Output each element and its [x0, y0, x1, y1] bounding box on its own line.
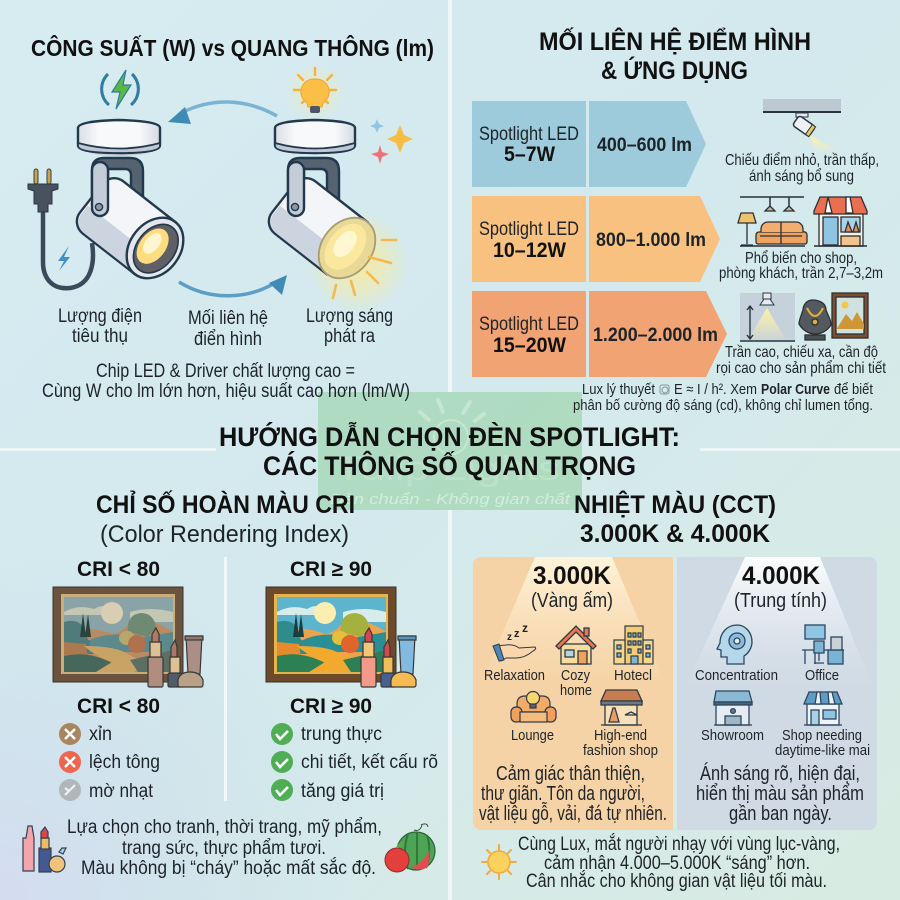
text: lux note	[573, 381, 874, 414]
icon: office	[802, 625, 844, 664]
icon: concentration	[717, 625, 752, 664]
labels: warm uses: home	[560, 682, 592, 699]
icon: fruits	[385, 824, 435, 872]
text: chip note	[42, 361, 410, 402]
image: painting vivid	[266, 587, 416, 687]
icon: sun	[482, 845, 516, 879]
list: CRI below 80	[59, 723, 160, 802]
list: CRI above 90: tăng giá trị	[301, 781, 384, 802]
text: neutral description: gần ban ngày.	[729, 803, 832, 825]
panel: CRI	[23, 489, 438, 879]
labels: warm uses: Lounge	[511, 727, 554, 744]
row: 15-20W: 1.200–2.000 lm	[593, 325, 718, 346]
labels: warm uses: Relaxation	[484, 667, 545, 684]
heading: CRI: CHỈ SỐ HOÀN MÀU CRI	[96, 489, 355, 519]
main title: CÁC THÔNG SỐ QUAN TRỌNG	[263, 449, 636, 481]
row: 5-7W: 5–7W	[504, 143, 555, 166]
text: row 3 use	[716, 344, 886, 377]
card: 3000K: 3.000K	[533, 562, 611, 590]
text: row 1 use	[725, 151, 879, 185]
list: CRI above 90: chi tiết, kết cấu rõ	[301, 752, 438, 773]
text: row 2 use: Phổ biến cho shop,	[745, 249, 857, 267]
labels: neutral uses: Shop needing	[782, 727, 862, 744]
heading: công suất vs quang thông: CÔNG SUẤT (W) vs QUANG THÔNG (lm)	[31, 34, 434, 61]
text: warm description	[479, 763, 667, 825]
text: lux note: Lux lý thuyết	[582, 381, 656, 398]
text: CCT note: Cân nhắc cho không gian vật liệu tối màu.	[526, 870, 827, 892]
watermark: Tulip Lights	[335, 450, 560, 488]
icon: lounge	[511, 692, 556, 722]
list: CRI below 80: mờ nhạt	[89, 781, 154, 802]
heading: mối liên hệ: MỐI LIÊN HỆ ĐIỂM HÌNH	[539, 26, 811, 56]
icon: showroom	[714, 691, 752, 725]
labels: neutral uses	[695, 667, 870, 759]
row: 5-7W: Spotlight LED	[479, 124, 579, 145]
icon: relaxation	[493, 621, 536, 661]
panel: công suất vs quang thông	[28, 34, 434, 402]
text: warm description: thư giãn. Tôn da người,	[481, 783, 645, 805]
text: row 2 use	[719, 249, 883, 282]
card: 4000K: (Trung tính)	[734, 590, 827, 612]
card: 4000K	[677, 557, 877, 830]
text: mối liên hệ: Mối liên hệ	[188, 308, 268, 329]
text: CRI note: Lựa chọn cho tranh, thời trang, mỹ phẩm,	[67, 817, 382, 838]
icon: sparkles	[370, 119, 413, 164]
icon: cosmetics	[23, 826, 66, 872]
labels: warm uses: High-end	[594, 727, 647, 744]
labels: warm uses: Cozy	[561, 667, 590, 684]
panel: CCT	[473, 489, 877, 892]
row: 10-12W: Spotlight LED	[479, 219, 579, 240]
text: CCT note: Cùng Lux, mắt người nhạy với vùng lục-vàng,	[518, 833, 840, 855]
card: 3000K	[473, 557, 673, 830]
text: chip note: Chip LED & Driver chất lượng cao =	[96, 361, 355, 382]
card: 4000K: 4.000K	[742, 562, 820, 590]
text: warm description: Cảm giác thân thiện,	[496, 763, 645, 785]
text: lux note: E ≈ I / h². Xem	[674, 381, 757, 398]
text: neutral description: Ánh sáng rõ, hiện đại,	[700, 762, 860, 785]
text: CRI note: Màu không bị “cháy” hoặc mất sắc độ.	[81, 857, 376, 879]
text: row 1 use: ánh sáng bổ sung	[749, 167, 854, 185]
divider	[224, 557, 227, 801]
icon: spotlight left	[71, 120, 195, 289]
text: neutral description: hiển thị màu sản phẩm	[696, 783, 864, 805]
text: lượng điện	[58, 306, 142, 347]
text: mối liên hệ	[188, 308, 268, 350]
text: CRI note	[67, 817, 382, 879]
image: painting dull	[53, 587, 203, 687]
icon: fashion shop	[601, 690, 642, 725]
text: CRI note: trang sức, thực phẩm tươi.	[122, 838, 326, 859]
labels: warm uses: fashion shop	[583, 742, 658, 759]
labels: neutral uses: Showroom	[701, 727, 764, 744]
icon: light rays	[333, 240, 396, 298]
labels: neutral uses: daytime-like mai	[775, 742, 870, 759]
watermark	[318, 392, 582, 510]
arrow: top curve	[168, 102, 277, 124]
row: 10-12W	[472, 196, 720, 282]
list: CRI above 90: trung thực	[301, 724, 382, 745]
row: 10-12W: 800–1.000 lm	[596, 230, 706, 251]
icon: spotlight right	[263, 120, 410, 314]
icon: track spotlight	[763, 99, 841, 151]
label: CRI above 90 lower: CRI ≥ 90	[290, 695, 372, 718]
text: CCT note	[518, 833, 840, 892]
icon: necklace bust and painting	[799, 293, 868, 340]
row: 15-20W: 15–20W	[493, 334, 566, 357]
text: CCT note: cảm nhận 4.000–5.000K “sáng” hơn.	[544, 853, 810, 874]
heading: CRI: (Color Rendering Index)	[100, 521, 349, 548]
icon: relaxation: z	[507, 632, 512, 643]
text: mối liên hệ: điển hình	[194, 329, 262, 350]
text: lượng sáng	[306, 306, 393, 347]
icon: high ceiling	[740, 293, 795, 341]
label: CRI below 80 lower: CRI < 80	[77, 695, 160, 718]
text: lượng sáng: phát ra	[324, 326, 375, 347]
labels: neutral uses: Office	[805, 667, 839, 684]
text: chip note: Cùng W cho lm lớn hơn, hiệu suất cao hơn (lm/W)	[42, 381, 410, 402]
icon: hotel	[614, 626, 653, 664]
heading: mối liên hệ	[539, 26, 811, 85]
text: lượng điện: Lượng điện	[58, 306, 142, 327]
main title	[219, 421, 680, 481]
icon: living room	[738, 197, 807, 246]
row: 5-7W: 400–600 lm	[597, 135, 692, 156]
arrow: bottom curve	[179, 275, 287, 296]
text: lux note: Polar Curve	[761, 381, 830, 398]
text: lux note: để biết	[834, 381, 874, 398]
heading: CCT: 3.000K & 4.000K	[580, 520, 770, 548]
list: CRI below 80: lệch tông	[89, 752, 160, 773]
icon: shop	[804, 692, 842, 725]
heading: CCT	[574, 489, 776, 548]
row: 15-20W	[472, 291, 727, 377]
label: CRI above 90: CRI ≥ 90	[290, 558, 372, 581]
text: neutral description	[696, 762, 864, 825]
icon: relaxation: z	[514, 628, 520, 640]
labels: warm uses	[484, 667, 658, 759]
text: lượng điện: tiêu thụ	[72, 326, 128, 347]
text: lượng sáng: Lượng sáng	[306, 306, 393, 327]
heading: CRI	[96, 489, 355, 548]
icon: plug and cord	[28, 169, 93, 288]
icon: light bulb	[285, 62, 345, 122]
icon: relaxation: z	[522, 621, 528, 635]
label: CRI below 80: CRI < 80	[77, 558, 160, 581]
main title: HƯỚNG DẪN CHỌN ĐÈN SPOTLIGHT:	[219, 421, 680, 452]
row: 10-12W: 10–12W	[493, 239, 566, 262]
row: 5-7W	[472, 101, 706, 187]
card: 3000K: (Vàng ấm)	[531, 590, 613, 612]
labels: warm uses: Hotecl	[614, 667, 652, 684]
icon: shop	[814, 197, 867, 246]
heading: CCT: NHIỆT MÀU (CCT)	[574, 489, 776, 519]
watermark: Đèn chuẩn - Không gian chất	[330, 491, 571, 508]
panel: mối liên hệ điển hình	[472, 26, 886, 414]
text: warm description: vật liệu gỗ, vải, đá tự nhiên.	[479, 802, 667, 825]
list: CRI below 80: xỉn	[89, 724, 112, 745]
icon: power bolt	[102, 70, 138, 109]
heading: mối liên hệ: & ỨNG DỤNG	[601, 55, 748, 85]
labels: neutral uses: Concentration	[695, 667, 778, 684]
row: 15-20W: Spotlight LED	[479, 314, 579, 335]
list: CRI above 90	[271, 723, 438, 802]
icon: cozy home	[556, 626, 596, 664]
